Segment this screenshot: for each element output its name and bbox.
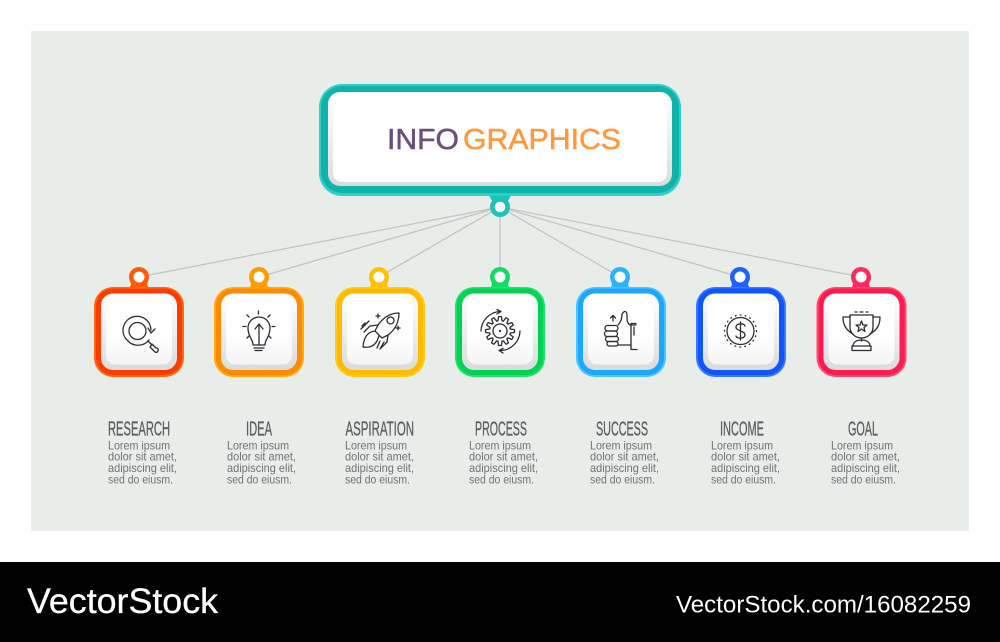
label: process (469, 418, 538, 486)
label: income: Lorem ipsum (711, 438, 773, 452)
label: aspiration: sed do eiusm. (345, 472, 410, 486)
card: income (696, 267, 786, 377)
icon: gear (481, 310, 520, 353)
label: idea: adipiscing elit, (227, 461, 296, 475)
icon: light bulb (243, 311, 275, 350)
label: research: sed do eiusm. (108, 472, 173, 486)
label: process: sed do eiusm. (469, 472, 534, 486)
card: idea (214, 267, 304, 377)
footer logo: VectorStock (27, 582, 219, 621)
label: aspiration: Lorem ipsum (345, 438, 407, 452)
label: success: dolor sit amet, (590, 450, 659, 464)
header node (490, 197, 510, 217)
icon: trophy (843, 312, 880, 350)
label: aspiration (345, 418, 414, 486)
label: process: PROCESS (475, 418, 527, 440)
label: success: SUCCESS (596, 418, 648, 440)
icon: rocket (361, 313, 400, 349)
label: income: sed do eiusm. (711, 472, 776, 486)
connector lines (139, 207, 861, 277)
label: research: RESEARCH (108, 418, 170, 440)
label: income: adipiscing elit, (711, 461, 780, 475)
label: process: dolor sit amet, (469, 450, 538, 464)
label: research (108, 418, 177, 486)
label: process: Lorem ipsum (469, 438, 531, 452)
card: aspiration (335, 267, 425, 377)
icon: magnifier (123, 316, 158, 352)
label: aspiration: dolor sit amet, (345, 450, 414, 464)
card: goal (816, 267, 906, 377)
card: research (94, 267, 184, 377)
label: goal: Lorem ipsum (831, 438, 893, 452)
label: goal: sed do eiusm. (831, 472, 896, 486)
header box (319, 84, 681, 217)
label: success: sed do eiusm. (590, 472, 655, 486)
label: idea (227, 418, 296, 486)
label: income (711, 418, 780, 486)
label: success: adipiscing elit, (590, 461, 659, 475)
label: success (590, 418, 659, 486)
label: idea: IDEA (246, 418, 272, 440)
icon: dollar coin (724, 315, 756, 347)
card: success (576, 267, 666, 377)
footer bar (0, 562, 1000, 642)
icon: thumbs up (604, 311, 637, 350)
title (387, 124, 621, 156)
label: income: dolor sit amet, (711, 450, 780, 464)
label: process: adipiscing elit, (469, 461, 538, 475)
label: idea: sed do eiusm. (227, 472, 292, 486)
label: research: adipiscing elit, (108, 461, 177, 475)
label: research: Lorem ipsum (108, 438, 170, 452)
background panel (31, 31, 969, 531)
label: idea: dolor sit amet, (227, 450, 296, 464)
label: goal (831, 418, 900, 486)
footer url: VectorStock.com/16082259 (676, 592, 971, 618)
label: goal: GOAL (848, 418, 878, 440)
label: idea: Lorem ipsum (227, 438, 289, 452)
label: research: dolor sit amet, (108, 450, 177, 464)
title: INFO (387, 124, 459, 156)
label: success: Lorem ipsum (590, 438, 652, 452)
label: income: INCOME (720, 418, 764, 440)
label: aspiration: adipiscing elit, (345, 461, 414, 475)
title: GRAPHICS (463, 124, 621, 156)
label: goal: adipiscing elit, (831, 461, 900, 475)
card: process (455, 267, 545, 377)
label: aspiration: ASPIRATION (346, 418, 414, 440)
label: goal: dolor sit amet, (831, 450, 900, 464)
